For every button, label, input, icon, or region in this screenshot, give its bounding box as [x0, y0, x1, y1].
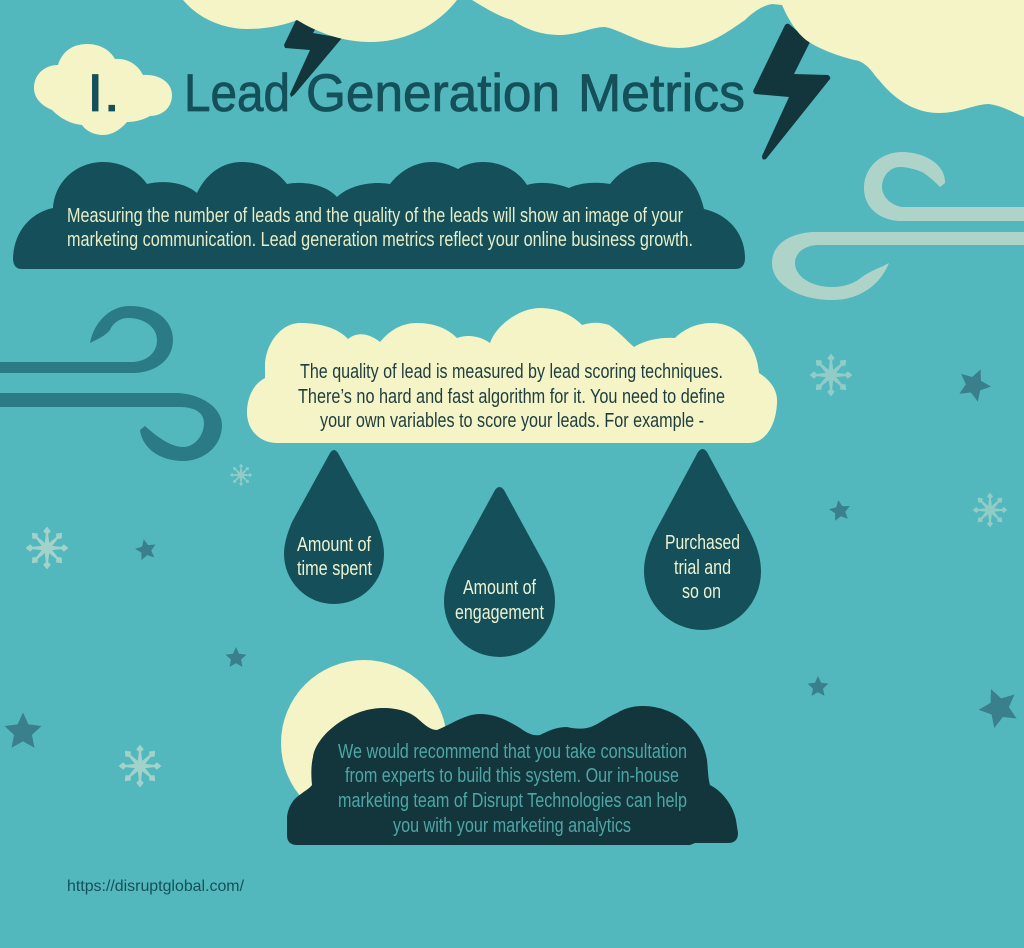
- recommendation text: We would recommend that you take consultation: [338, 741, 687, 763]
- icon: lightning bolt right: [753, 24, 830, 160]
- moon: [281, 660, 447, 826]
- recommendation text: marketing team of Disrupt Technologies can help: [338, 790, 687, 812]
- drop: purchased trial and so on: trial and: [674, 557, 731, 579]
- drop: amount of time spent: time spent: [297, 558, 372, 580]
- cloud: top right: [780, 0, 1024, 117]
- icon: stars: [4, 363, 1023, 748]
- icon: wind top right: [772, 152, 1024, 300]
- title: Metrics: [578, 64, 745, 123]
- title: Generation: [306, 64, 560, 123]
- icon: lightning bolt left: [284, 18, 342, 97]
- icon: snowflakes: [26, 354, 1007, 787]
- cloud: top center: [472, 0, 782, 48]
- lead scoring text: There’s no hard and fast algorithm for it. You need to define: [298, 386, 725, 408]
- drop: amount of time spent: Amount of: [297, 534, 371, 556]
- cloud: section number: [34, 44, 172, 135]
- section number: I.: [87, 64, 120, 123]
- intro text: [67, 205, 693, 251]
- panel: lead scoring cloud: [247, 308, 777, 443]
- recommendation text: you with your marketing analytics: [393, 815, 631, 837]
- panel: intro cloud: [13, 162, 745, 269]
- drop: amount of engagement: [444, 487, 555, 657]
- icon: wind left: [0, 306, 222, 461]
- drop: amount of engagement: Amount of: [463, 577, 536, 599]
- drop: purchased trial and so on: Purchased: [665, 532, 740, 554]
- lead scoring text: your own variables to score your leads. For example -: [320, 410, 704, 432]
- intro text: marketing communication. Lead generation metrics reflect your online business growth.: [67, 229, 693, 251]
- recommendation text: [338, 741, 687, 837]
- drop: purchased trial and so on: [644, 449, 761, 630]
- drop: amount of engagement: engagement: [455, 602, 544, 624]
- top clouds: [183, 0, 1024, 117]
- cloud: top left: [183, 0, 457, 42]
- title: [184, 64, 745, 123]
- lead scoring text: [298, 361, 725, 432]
- panel: recommendation cloud: [287, 706, 738, 845]
- recommendation text: from experts to build this system. Our in-house: [345, 765, 679, 787]
- source url: https://disruptglobal.com/: [67, 878, 245, 895]
- title: Lead: [184, 64, 290, 123]
- intro text: Measuring the number of leads and the quality of the leads will show an image of your: [67, 205, 683, 227]
- drop: purchased trial and so on: so on: [682, 581, 721, 603]
- drop: amount of time spent: [284, 450, 384, 604]
- lead scoring text: The quality of lead is measured by lead scoring techniques.: [300, 361, 723, 383]
